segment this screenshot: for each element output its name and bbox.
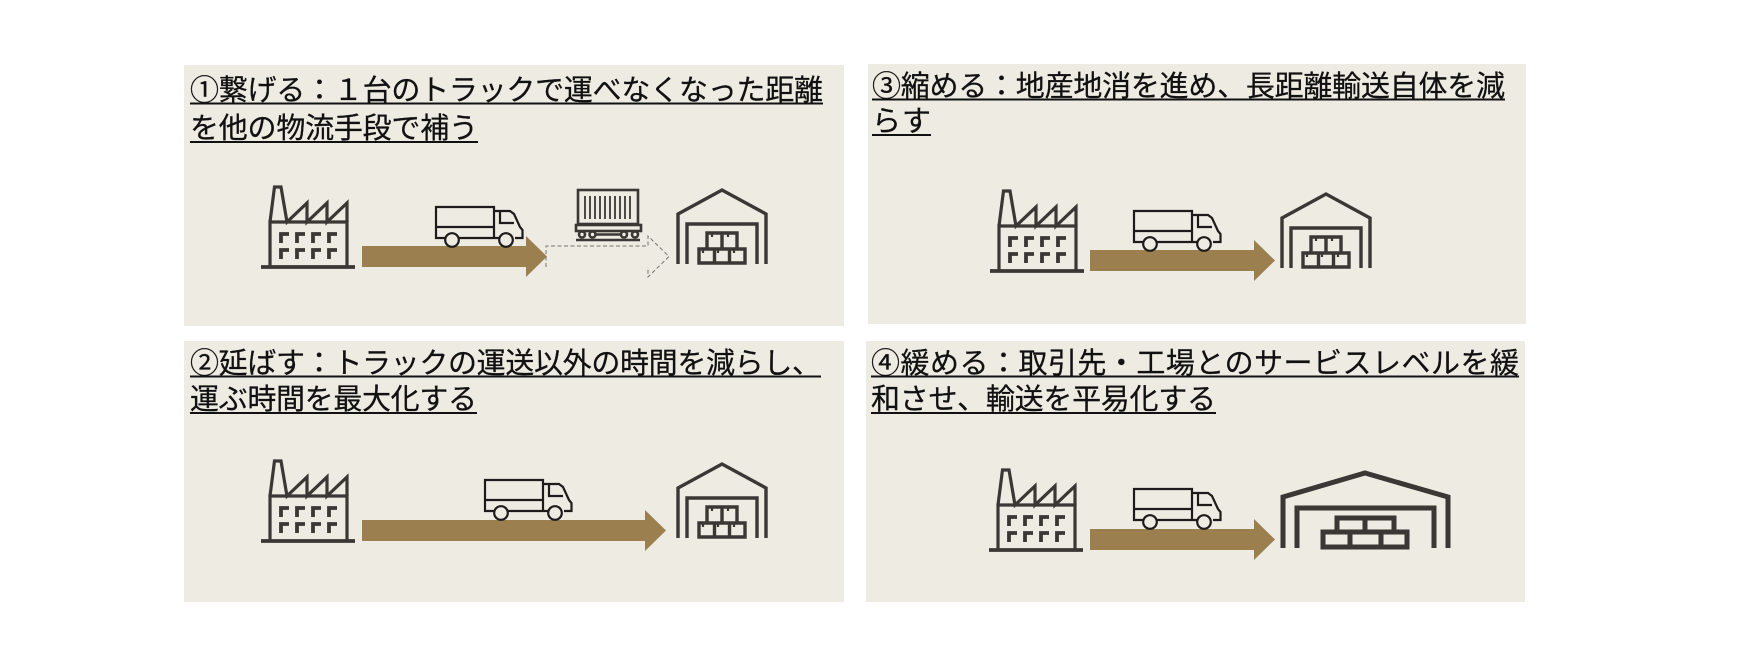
heading: panel 4: 和させ、輸送を平易化する [871,383,1216,416]
heading: panel 4: ④緩める：取引先・工場とのサービスレベルを緩 [871,347,1519,380]
arrow: extended truck leg [362,510,666,551]
icon: truck [436,207,522,247]
arrow: dashed rail leg [546,236,669,277]
icon: factory [990,191,1084,271]
heading: panel 3 [872,70,1505,138]
icon: warehouse [678,464,766,538]
icon: factory [261,187,355,267]
heading: panel 2: 運ぶ時間を最大化する [190,383,477,416]
icon: large warehouse [1283,473,1448,548]
panel 2: extend [184,341,844,602]
icon: factory [989,470,1083,550]
icon: warehouse [1282,194,1370,268]
icon: truck [485,480,572,520]
arrow: short truck leg [1090,240,1275,281]
icon: factory [261,461,355,541]
heading: panel 2 [190,347,821,416]
heading: panel 1 [190,74,823,145]
icon: warehouse [678,190,766,264]
heading: panel 2: ②延ばす：トラックの運送以外の時間を減らし、 [190,347,821,380]
icon: truck [1134,489,1220,529]
heading: panel 1: を他の物流手段で補う [190,112,478,145]
icon: truck [1134,211,1220,251]
panel 4: ease [866,341,1525,602]
icon: container on rail wagon [576,190,641,240]
heading: panel 3: ③縮める：地産地消を進め、長距離輸送自体を減 [872,70,1505,103]
heading: panel 3: らす [872,106,931,138]
panel 1: connect [184,65,844,326]
panel 3: shorten [868,64,1526,324]
heading: panel 4 [871,347,1519,416]
arrow: truck leg [1090,519,1275,560]
arrow: truck leg [362,236,547,277]
heading: panel 1: ①繋げる：１台のトラックで運べなくなった距離 [190,74,823,107]
